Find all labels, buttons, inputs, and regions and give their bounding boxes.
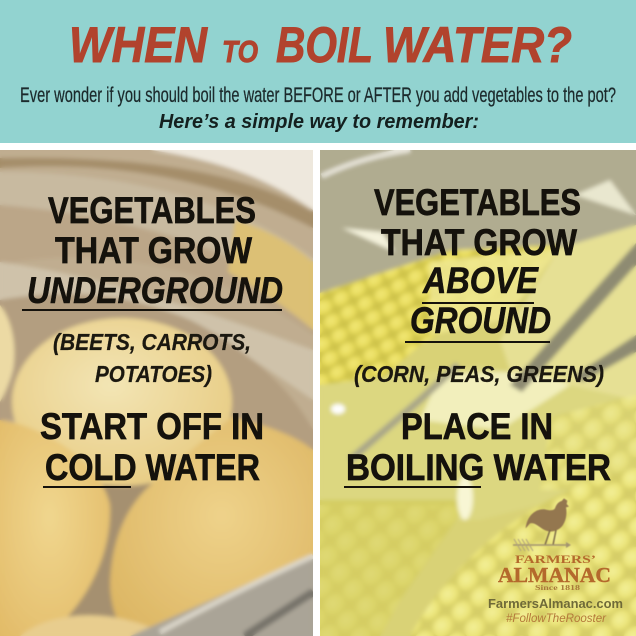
- text: vegetables that grow underground: VEGETABLES: [48, 190, 256, 231]
- text: examples: [53, 329, 251, 387]
- text: place in boiling water: PLACE IN: [401, 406, 553, 447]
- text: vegetables that grow above ground: GROUND: [410, 300, 551, 341]
- subheading: Here’s a simple way to remember:: [159, 111, 479, 133]
- title: BOIL: [276, 17, 373, 73]
- logo wordmark: FARMERS’: [515, 554, 596, 566]
- text: vegetables that grow above ground: [374, 182, 581, 343]
- title: [69, 17, 572, 73]
- text: vegetables that grow underground: [22, 190, 283, 311]
- panel: underground vegetables: [0, 150, 313, 636]
- text: place in boiling water: BOILING WATER: [346, 447, 611, 488]
- text: start off in cold water: COLD WATER: [45, 447, 260, 488]
- hashtag: #FollowTheRooster: [506, 613, 607, 625]
- text: corn, peas, greens: (CORN, PEAS, GREENS): [354, 361, 604, 387]
- text: examples: (BEETS, CARROTS,: [53, 329, 251, 355]
- text: vegetables that grow above ground: ABOVE: [422, 260, 539, 301]
- icon: rooster weathervane: [513, 498, 571, 551]
- text: start off in cold water: [40, 406, 264, 488]
- logo: Farmers' Almanac: [488, 498, 623, 625]
- photo: corn in boiling water: [320, 150, 636, 636]
- panel: above ground vegetables: [320, 150, 636, 636]
- title: WATER?: [383, 17, 572, 73]
- logo wordmark: Since 1818: [535, 584, 581, 592]
- title: WHEN: [69, 17, 208, 73]
- text: vegetables that grow underground: UNDERGROUND: [27, 270, 283, 311]
- text: vegetables that grow above ground: VEGETABLES: [374, 182, 581, 223]
- header banner: [0, 0, 636, 143]
- text: place in boiling water: [344, 406, 611, 488]
- text: vegetables that grow underground: THAT GROW: [55, 230, 252, 271]
- website: FarmersAlmanac.com: [488, 597, 623, 611]
- logo wordmark: ALMANAC: [498, 563, 611, 587]
- title: TO: [222, 34, 258, 69]
- photo: potatoes in a pot: [0, 150, 313, 636]
- text: examples: POTATOES): [95, 361, 212, 387]
- text: vegetables that grow above ground: THAT GROW: [381, 222, 577, 263]
- logo wordmark: [498, 556, 610, 590]
- text: start off in cold water: START OFF IN: [40, 406, 264, 447]
